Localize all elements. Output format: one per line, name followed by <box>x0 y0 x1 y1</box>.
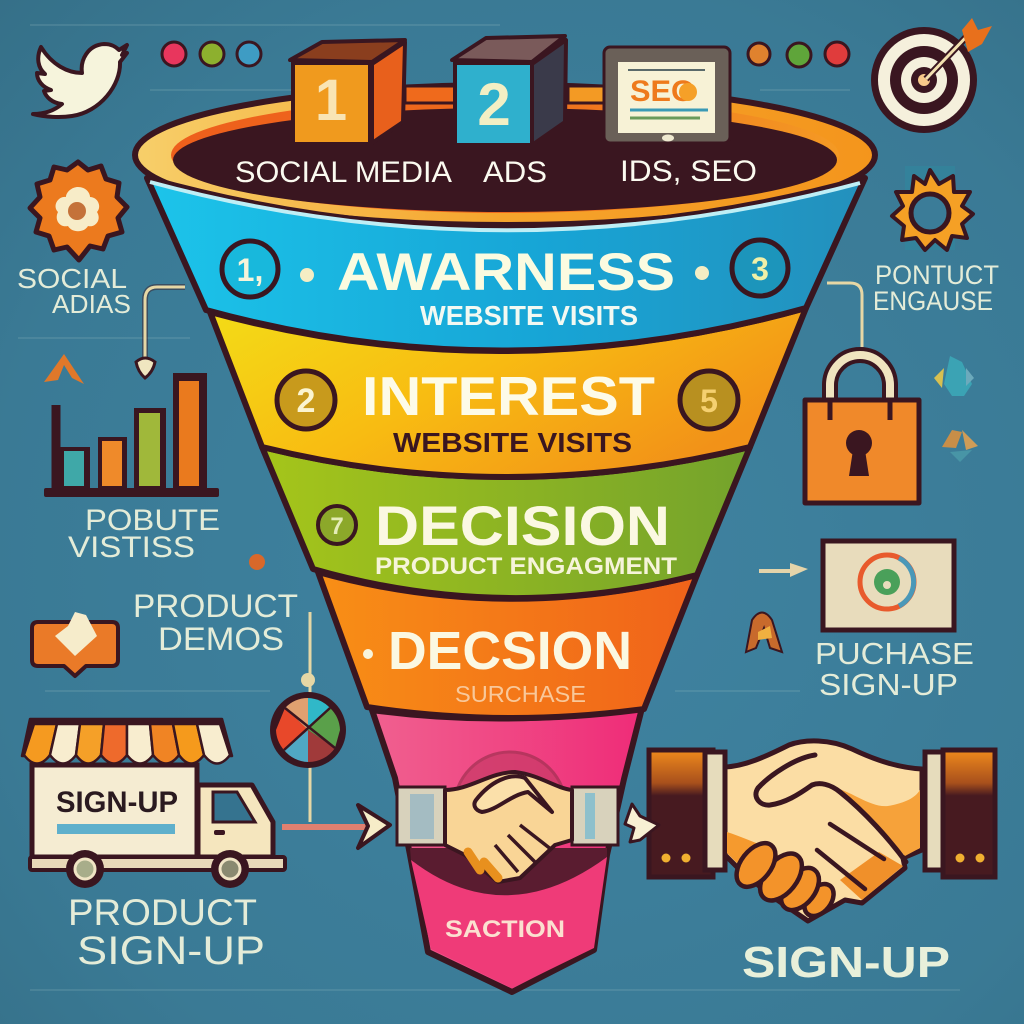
icon: sign-up truck <box>22 719 285 888</box>
icon: left gear <box>30 162 127 260</box>
funnel stage 4: orange: DECSION <box>388 621 632 681</box>
label: puchase sign-up: SIGN-UP <box>819 667 958 702</box>
bar chart <box>44 373 219 497</box>
palm <box>725 741 922 921</box>
status dots left <box>162 42 261 66</box>
finger shade <box>840 852 903 900</box>
small orange dot <box>249 554 265 570</box>
label: product demos: PRODUCT <box>133 588 298 624</box>
tablet SEO <box>604 47 730 143</box>
label: social adias <box>17 263 131 319</box>
funnel stage 5: action <box>372 708 642 992</box>
box 2 <box>452 36 566 145</box>
badge 5 <box>680 371 738 429</box>
awning <box>22 719 232 764</box>
arrow to funnel <box>282 805 390 848</box>
badge 1: 1, <box>237 252 263 288</box>
icon: small teal shape <box>934 356 974 396</box>
big handshake <box>649 741 995 922</box>
arrow to big handshake <box>625 804 659 842</box>
icon: right gear <box>892 166 973 250</box>
funnel stage 1: blue: WEBSITE VISITS <box>420 300 638 331</box>
funnel rim <box>135 85 875 225</box>
status dots right <box>748 42 849 67</box>
right shade <box>832 787 920 856</box>
rim labels <box>235 155 757 189</box>
rim labels: ADS <box>483 156 547 189</box>
truck cab <box>198 785 273 857</box>
funnel stage 3: green: 7 <box>330 513 344 540</box>
box 2: 2 <box>477 71 511 138</box>
label: puchase sign-up: PUCHASE <box>815 636 974 671</box>
icon: tag with diamond <box>32 612 118 676</box>
label: product sign-up: SIGN-UP <box>77 929 265 973</box>
label: pobute vistiss: POBUTE <box>85 504 220 537</box>
icon: padlock <box>805 355 919 503</box>
label: product demos <box>133 588 298 657</box>
label: product sign-up <box>68 892 265 973</box>
connector strips on rim <box>405 86 606 103</box>
badge 3: 3 <box>751 251 769 287</box>
lower left shade <box>727 832 795 893</box>
tablet SEO: SEO <box>630 75 695 108</box>
small arrow <box>759 563 808 577</box>
box 1: 1 <box>315 68 347 133</box>
label: puchase sign-up <box>815 636 974 702</box>
funnel stage 1: blue: AWARNESS <box>337 243 675 302</box>
badge 2 <box>277 371 335 429</box>
label: sign-up: SIGN-UP <box>742 938 950 987</box>
truck body <box>32 765 197 857</box>
icon: twitter bird <box>33 44 127 117</box>
funnel stage 1: blue <box>147 178 865 351</box>
icon: small A shape <box>746 612 782 652</box>
badge 5: 5 <box>700 383 718 419</box>
label: pontuct engause: PONTUCT <box>875 260 999 290</box>
funnel stage 2: yellow <box>210 308 806 477</box>
funnel stage 2: yellow: WEBSITE VISITS <box>393 427 632 458</box>
connector left <box>136 287 185 378</box>
box 1 <box>290 40 405 144</box>
funnel inner opening <box>171 97 839 213</box>
icon: small orange tent <box>44 354 84 384</box>
thumb <box>756 755 906 862</box>
small handshake <box>397 772 618 882</box>
rim labels: IDS, SEO <box>620 155 757 188</box>
label: product demos: DEMOS <box>158 621 284 657</box>
badge 2: 2 <box>297 382 315 420</box>
badge 1 <box>222 241 278 297</box>
label: social adias: ADIAS <box>52 289 131 319</box>
funnel stage 3: green <box>262 447 750 598</box>
pie chart with vertical connector <box>270 612 346 822</box>
funnel <box>135 85 875 992</box>
label: pontuct engause <box>873 260 999 316</box>
funnel stage 4: orange <box>318 572 697 718</box>
funnel stage 4: orange: SURCHASE <box>455 681 586 707</box>
icon: sign-up truck: SIGN-UP <box>56 786 178 819</box>
funnel stage 3: green: PRODUCT ENGAGMENT <box>375 553 677 580</box>
label: product sign-up: PRODUCT <box>68 892 257 933</box>
icon: framed ring picture <box>823 541 954 630</box>
rim labels: SOCIAL MEDIA <box>235 156 452 189</box>
icon: small multicolour shape <box>942 430 978 462</box>
label: pontuct engause: ENGAUSE <box>873 286 993 316</box>
connector right <box>827 283 862 347</box>
badge 3 <box>732 240 788 296</box>
fingers <box>729 836 840 922</box>
label: pobute vistiss <box>68 504 220 564</box>
left cuff <box>649 750 725 877</box>
label: saction: SACTION <box>445 916 565 943</box>
right cuff <box>925 750 995 877</box>
icon: target with arrow <box>871 18 992 133</box>
label: pobute vistiss: VISTISS <box>68 531 195 564</box>
hands <box>725 741 922 922</box>
funnel stage 2: yellow: INTEREST <box>362 365 655 427</box>
label: social adias: SOCIAL <box>17 263 127 294</box>
funnel stage 3: green: DECISION <box>375 494 670 557</box>
